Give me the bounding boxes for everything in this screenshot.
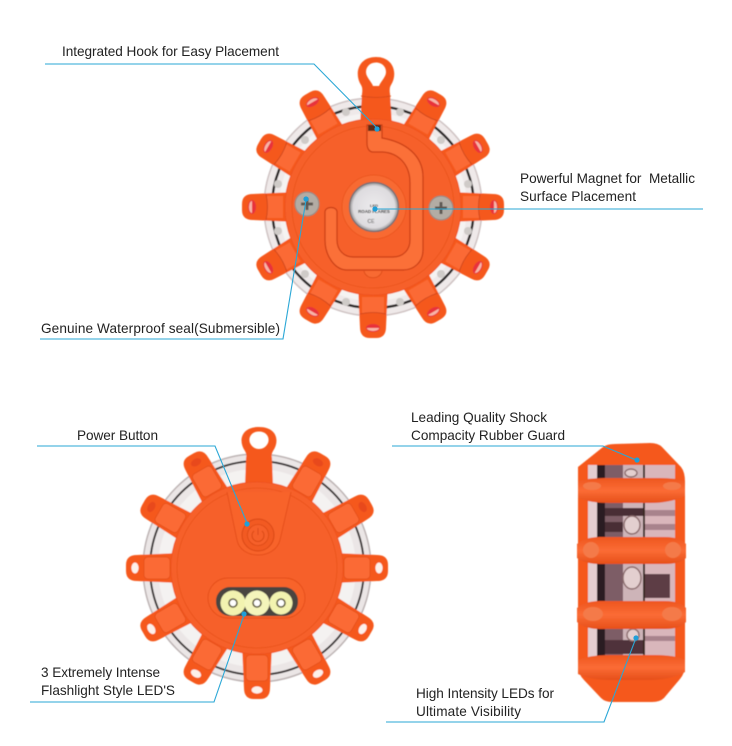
body — [578, 443, 685, 702]
main disk — [171, 482, 343, 654]
callout: flashlight LEDs: Flashlight Style LED'S — [41, 683, 175, 698]
callout: flashlight LEDs — [30, 611, 247, 702]
callout: rubber guard: Leading Quality Shock — [411, 410, 547, 425]
callout: magnet: Powerful Magnet for Metallic — [520, 171, 695, 186]
lens windows — [588, 465, 675, 660]
callout: high intensity LEDs: Ultimate Visibility — [416, 704, 521, 719]
callout: magnet — [372, 171, 703, 212]
rubber tabs — [126, 447, 388, 699]
integrated hook — [358, 57, 394, 125]
LED flashlight — [208, 578, 305, 618]
callout: hook — [45, 44, 380, 132]
callout: flashlight LEDs: 3 Extremely Intense — [41, 665, 160, 680]
callout: waterproof seal: Genuine Waterproof seal(Submersible) — [41, 321, 280, 336]
integrated hook — [242, 427, 276, 486]
screw right — [429, 196, 453, 220]
LED bulbs — [623, 469, 641, 641]
hook channel — [325, 125, 423, 270]
clear lens ring — [143, 454, 371, 682]
callout: high intensity LEDs — [386, 635, 639, 722]
power button housing — [227, 492, 291, 555]
callout: magnet: Surface Placement — [520, 189, 636, 204]
screw left — [295, 192, 319, 216]
product: flare side view — [577, 443, 686, 702]
callout: hook: Integrated Hook for Easy Placement — [62, 44, 279, 59]
magnet: LED — [370, 203, 378, 208]
rubber tabs — [242, 86, 504, 338]
main disk — [285, 119, 461, 295]
magnet: CE — [368, 219, 375, 225]
product: flare back view — [242, 57, 504, 338]
callout: high intensity LEDs: High Intensity LEDs for — [416, 686, 554, 701]
magnet: ROAD FLARES — [358, 209, 390, 214]
guard cut-outs — [583, 482, 682, 621]
rubber guard bands — [577, 478, 686, 680]
callout: rubber guard: Compacity Rubber Guard — [411, 428, 565, 443]
callout: power button: Power Button — [77, 428, 158, 443]
callout: waterproof seal — [40, 196, 309, 339]
clear lens ring — [264, 98, 482, 316]
callout: power button — [37, 428, 250, 527]
product: flare front view — [126, 427, 388, 699]
magnet — [342, 175, 406, 239]
callout: rubber guard — [392, 410, 640, 463]
